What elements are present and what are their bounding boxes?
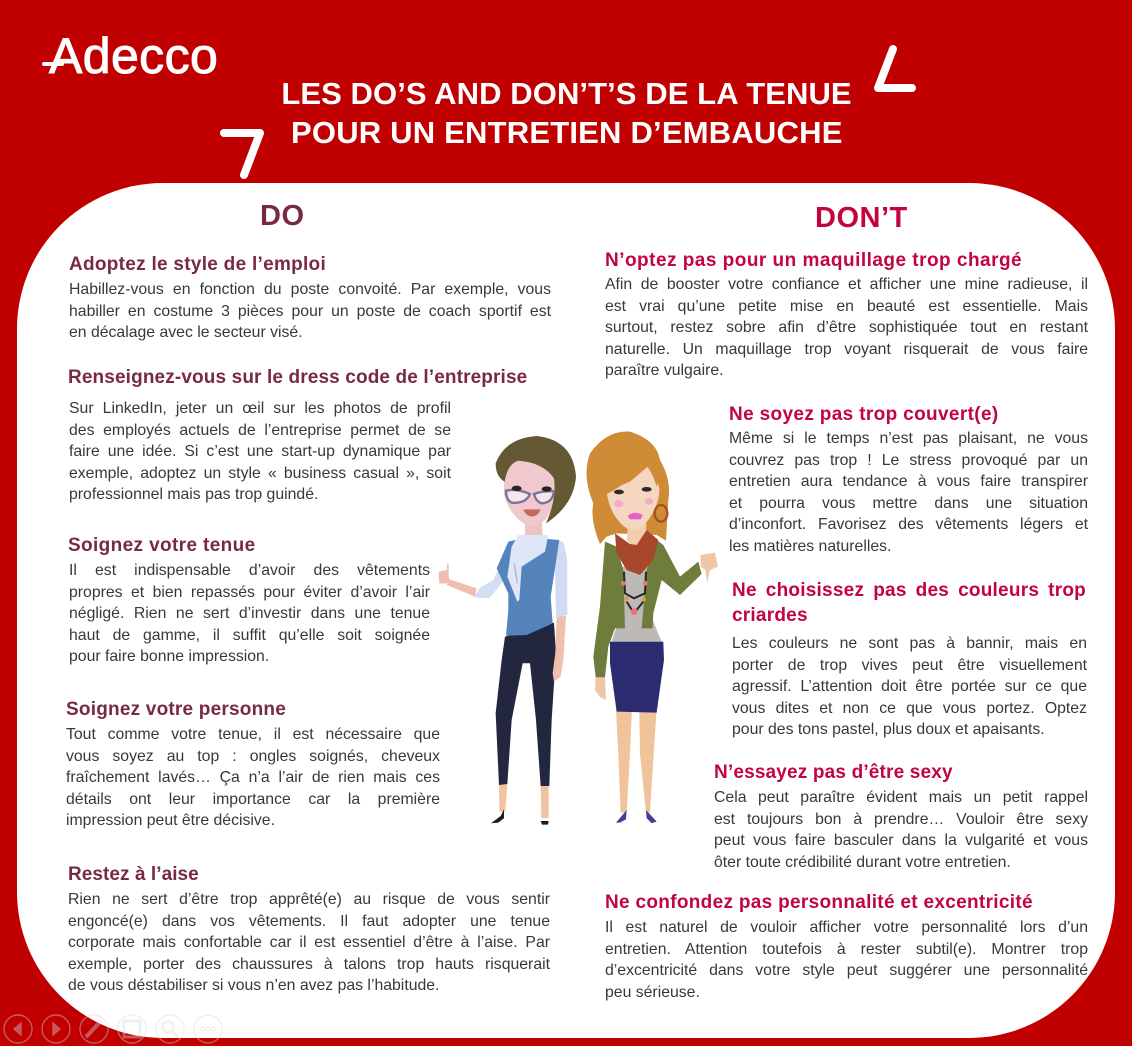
do tip text: tenue xyxy=(69,562,430,665)
title xyxy=(281,76,852,150)
do tip text: tenue: pour faire bonne impression. xyxy=(69,648,269,665)
do tip text: style de l'emploi xyxy=(69,281,551,341)
do tip text: tenue: Il est indispensable d’avoir des vêtements xyxy=(69,562,430,579)
do tip text: tenue: négligé. Rien ne sert d’investir dans une tenue xyxy=(69,605,430,622)
dont tip text: maquillage: paraître vulgaire. xyxy=(605,362,724,379)
dont tip text: couleurs: Les couleurs ne sont pas à bannir, mais en xyxy=(732,635,1087,652)
dont tip text: sexy: est toujours bon à prendre… Vouloir être sexy xyxy=(714,811,1088,828)
icon: pen xyxy=(80,1015,108,1043)
title: POUR UN ENTRETIEN D’EMBAUCHE xyxy=(291,115,843,150)
heading: DON'T: DON’T xyxy=(815,202,908,234)
dont tip text: sexy: Cela peut paraître évident mais un petit rappel xyxy=(714,789,1088,806)
do tip text: aise xyxy=(68,891,550,994)
dont tip text: couvert: d’inconfort. Favorisez des vêtements légers et xyxy=(729,516,1088,533)
dont tip heading: couleurs: Ne choisissez pas des couleurs trop xyxy=(732,580,1086,601)
dont tip text: sexy: peut vous faire basculer dans la vulgarité et vous xyxy=(714,832,1088,849)
icon: more xyxy=(194,1015,222,1043)
dont tip text: maquillage xyxy=(605,276,1088,379)
dont tip text: excentricité: d’excentricité dans votre style peut suggérer une personnalité xyxy=(605,962,1088,979)
dont tip text: couvert: les matières naturelles. xyxy=(729,538,891,555)
do tip heading: aise: Restez à l’aise xyxy=(68,864,199,885)
illustration: woman thumbs down xyxy=(587,432,718,823)
do tip text: dress code: Sur LinkedIn, jeter un œil sur les photos de profil xyxy=(69,400,451,417)
do tip text: dress code xyxy=(69,400,451,503)
title: LES DO’S AND DON’T’S DE LA TENUE xyxy=(281,76,852,111)
do tip text: personne: fraîchement lavés… Ça n’a l’air de rien mais ces xyxy=(66,769,440,786)
do tip heading: tenue: Soignez votre tenue xyxy=(68,535,256,556)
heading: DO: DO xyxy=(260,200,304,232)
do tip text: dress code: faire une idée. Si c’est une start-up dynamique par xyxy=(69,443,451,460)
do tip text: style de l'emploi: Habillez-vous en fonction du poste convoité. Par exemple, vous xyxy=(69,281,551,298)
dont tip text: sexy xyxy=(714,789,1088,871)
dont tip text: maquillage: est vrai qu’une petite mise en beauté est essentielle. Mais xyxy=(605,298,1088,315)
dont tip heading: maquillage: N’optez pas pour un maquillage trop chargé xyxy=(605,250,1022,271)
do tip heading: personne: Soignez votre personne xyxy=(66,699,286,720)
do tip text: aise: engoncé(e) dans vos vêtements. Il faut adopter une tenue xyxy=(68,913,550,930)
do tip text: style de l'emploi: en décalage avec le secteur visé. xyxy=(69,324,303,341)
dont tip text: maquillage: Afin de booster votre confiance et afficher une mine radieuse, il xyxy=(605,276,1088,293)
dont tip text: couleurs xyxy=(732,635,1087,738)
dont tip heading: couvert: Ne soyez pas trop couvert(e) xyxy=(729,404,999,425)
dont tip text: couleurs: vous dites et non ce que vous portez. Optez xyxy=(732,700,1087,717)
icon: previous xyxy=(4,1015,32,1043)
do tip text: aise: de vous déstabiliser si vous n’en avez pas l’habitude. xyxy=(68,977,439,994)
white content panel xyxy=(17,183,1115,1038)
do tip text: personne: détails ont leur importance car la première xyxy=(66,791,440,808)
dont tip text: couleurs: porter de trop vives peut être visuellement xyxy=(732,657,1087,674)
dont tip heading: excentricité: Ne confondez pas personnalité et excentricité xyxy=(605,892,1033,913)
do tip text: dress code: exemple, adoptez un style « business casual », soit xyxy=(69,465,451,482)
icon: next xyxy=(42,1015,70,1043)
slideshow controls xyxy=(4,1015,222,1043)
icon: slides xyxy=(118,1015,146,1043)
dont tip text: couvert: couvrez pas trop ! Le stress provoqué par un xyxy=(729,452,1088,469)
dont tip text: couleurs: agressif. L’attention doit être portée sur ce que xyxy=(732,678,1087,695)
dont tip text: couvert: entretien aura tendance à vous faire transpirer xyxy=(729,473,1088,490)
illustration: woman thumbs up xyxy=(439,436,576,825)
dont tip text: excentricité: peu sérieuse. xyxy=(605,984,700,1001)
dont tip text: maquillage: surtout, restez sobre afin d’être sophistiquée tout en restant xyxy=(605,319,1088,336)
do tip text: personne: impression peut être décisive. xyxy=(66,812,275,829)
do tip heading: dress code: Renseignez-vous sur le dress code de l’entreprise xyxy=(68,367,527,388)
dont tip text: maquillage: naturelle. Un maquillage trop voyant risquerait de vous faire xyxy=(605,341,1088,358)
icon: search xyxy=(156,1015,184,1043)
do tip text: personne: vous soyez au top : ongles soignés, cheveux xyxy=(66,748,440,765)
do tip text: style de l'emploi: habiller en costume 3 pièces pour un poste de coach sportif est xyxy=(69,303,551,320)
dont tip text: excentricité: Il est naturel de vouloir afficher votre personnalité lors d’un xyxy=(605,919,1088,936)
do tip text: personne xyxy=(66,726,440,829)
logo: Adecco: Adecco xyxy=(49,28,218,84)
do tip text: tenue: propres et bien repassés pour éviter d’avoir l’air xyxy=(69,584,430,601)
do tip text: aise: exemple, porter des chaussures à talons trop hauts risquerait xyxy=(68,956,550,973)
dont tip heading: sexy: N’essayez pas d’être sexy xyxy=(714,762,953,783)
dont tip text: excentricité: entretien. Attention toutefois à rester subtil(e). Montrer trop xyxy=(605,941,1088,958)
dont tip text: couvert: Même si le temps n’est pas plaisant, ne vous xyxy=(729,430,1088,447)
do tip text: aise: Rien ne sert d’être trop apprêté(e) au risque de vous sentir xyxy=(68,891,550,908)
dont tip text: sexy: ôter toute crédibilité durant votre entretien. xyxy=(714,854,1011,871)
dont tip heading: couleurs xyxy=(732,580,1086,626)
do tip text: personne: Tout comme votre tenue, il est nécessaire que xyxy=(66,726,440,743)
do tip text: aise: corporate mais confortable car il est essentiel d’être à l’aise. Par xyxy=(68,934,550,951)
dont tip text: couvert xyxy=(729,430,1088,555)
dont tip heading: couleurs: criardes xyxy=(732,605,808,626)
dont tip text: couvert: et pourra vous mettre dans une situation xyxy=(729,495,1088,512)
do tip heading: style de l'emploi: Adoptez le style de l’emploi xyxy=(69,254,326,275)
dont tip text: excentricité xyxy=(605,919,1088,1001)
dont tip text: couleurs: pour des tons pastel, plus doux et apaisants. xyxy=(732,721,1045,738)
do tip text: tenue: haut de gamme, il suffit qu’elle soit soignée xyxy=(69,627,430,644)
do tip text: dress code: professionnel mais pas trop guindé. xyxy=(69,486,318,503)
do tip text: dress code: des employés actuels de l’entreprise permet de se xyxy=(69,422,451,439)
